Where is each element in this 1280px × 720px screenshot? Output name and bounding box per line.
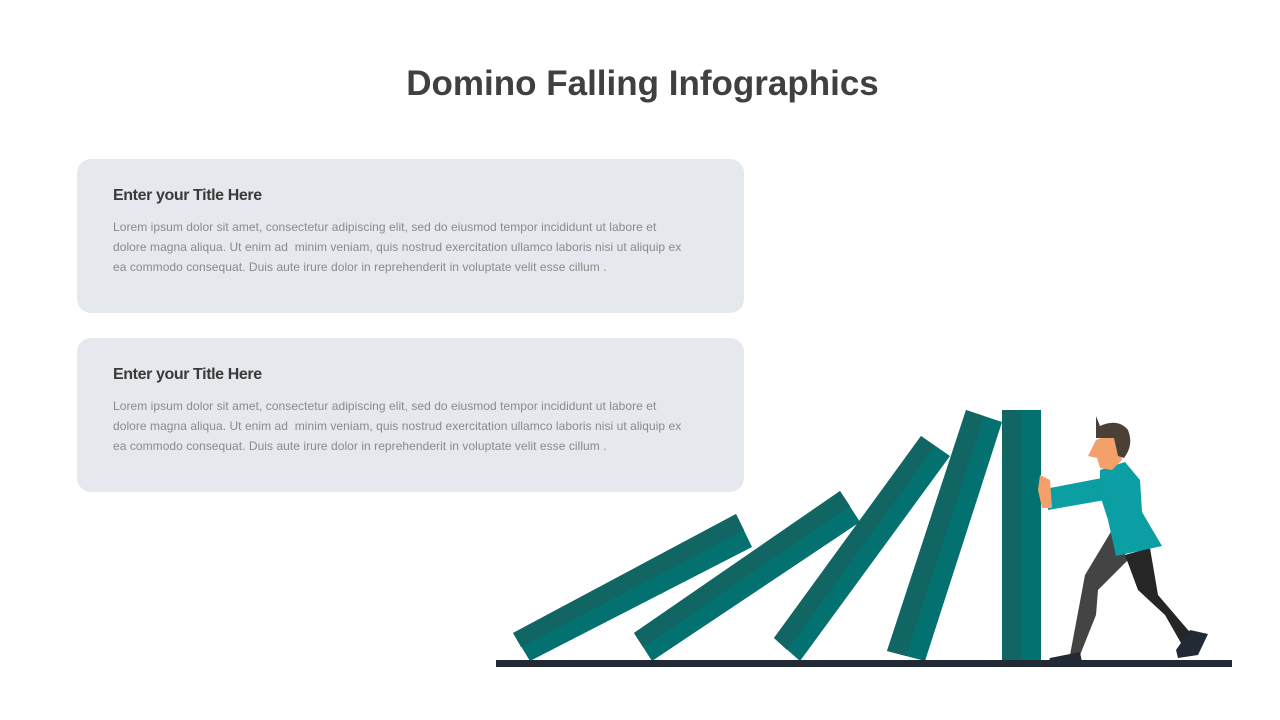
card 2 heading: Enter your Title Here (113, 366, 262, 383)
card 1 text (113, 220, 681, 274)
card 1 heading: Enter your Title Here (113, 187, 262, 204)
domino 5 (1002, 410, 1041, 661)
card 1 text: ea commodo consequat. Duis aute irure dolor in reprehenderit in voluptate velit esse cillum . (113, 260, 607, 274)
card 2 text: Lorem ipsum dolor sit amet, consectetur adipiscing elit, sed do eiusmod tempor incididunt ut labore et (113, 399, 656, 413)
title: Domino Falling Infographics (406, 64, 879, 103)
panel: card 1 (77, 159, 744, 313)
domino 4 (887, 410, 1002, 661)
card 2 text: ea commodo consequat. Duis aute irure dolor in reprehenderit in voluptate velit esse cillum . (113, 439, 607, 453)
card 2 text (113, 399, 681, 453)
ground line (496, 660, 1232, 667)
man pushing (1038, 416, 1208, 663)
card 1 text: Lorem ipsum dolor sit amet, consectetur adipiscing elit, sed do eiusmod tempor incididunt ut labore et (113, 220, 656, 234)
domino 2 (634, 491, 860, 661)
card 1 text: dolore magna aliqua. Ut enim ad minim veniam, quis nostrud exercitation ullamco laboris nisi ut aliquip ex (113, 240, 681, 254)
panel: card 2 (77, 338, 744, 492)
domino 1 (513, 514, 752, 661)
domino 3 (774, 436, 950, 661)
card 2 text: dolore magna aliqua. Ut enim ad minim veniam, quis nostrud exercitation ullamco laboris nisi ut aliquip ex (113, 419, 681, 433)
